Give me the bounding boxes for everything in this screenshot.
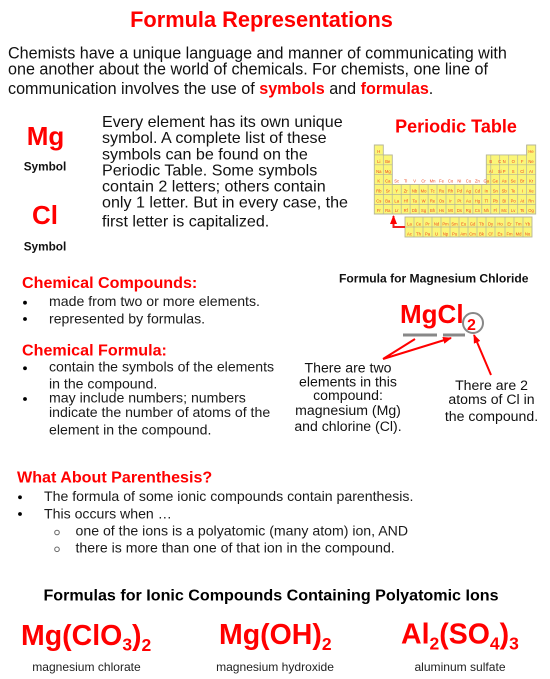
diagram heading: Formula for Magnesium Chloride (339, 272, 529, 286)
arrow: subscript (474, 335, 491, 375)
periodic table grid: Fr (377, 208, 381, 213)
intro paragraph: communication involves the use of symbols and formulas. (8, 80, 433, 98)
chemical formula bullets: in the compound. (49, 376, 157, 392)
periodic table grid: Xe (529, 188, 534, 194)
periodic table grid: Hg (475, 198, 481, 204)
periodic table grid: Db (412, 208, 418, 213)
callout: two atoms: the compound. (445, 408, 538, 424)
periodic table grid: Mg (385, 169, 391, 174)
periodic table grid: Lv (511, 208, 516, 213)
periodic table grid: Bk (479, 232, 485, 236)
formula: magnesium hydroxide: 2 (322, 634, 332, 654)
periodic table grid: Cr (421, 178, 426, 184)
periodic table grid: Ne (528, 159, 534, 164)
periodic table grid: Md (516, 232, 522, 236)
periodic table grid: Tm (515, 222, 522, 226)
intro paragraph: one another about the world of chemicals. For chemists, one line of (8, 60, 489, 78)
periodic table grid: Sn (493, 188, 499, 194)
formula: aluminum sulfate: 4 (490, 634, 500, 654)
periodic table grid: Nh (484, 208, 490, 213)
intro paragraph: Chemists have a unique language and manner of communicating with (8, 44, 507, 62)
periodic table grid: W (422, 198, 426, 204)
periodic table grid: La (394, 198, 400, 204)
periodic table grid: Gd (470, 222, 476, 226)
periodic table grid: Ti (404, 178, 407, 184)
callout: two elements: and chlorine (Cl). (294, 418, 402, 434)
periodic table grid: Cm (469, 232, 476, 236)
chemical compounds heading: Chemical Compounds: (22, 274, 197, 292)
periodic table grid: He (528, 149, 534, 154)
callout: two atoms (445, 377, 538, 424)
panel: chemical compounds (22, 274, 260, 326)
chemical compounds bullets: made from two or more elements. (49, 293, 260, 309)
panel: periodic table (374, 117, 536, 237)
chemical compounds bullets: represented by formulas. (49, 310, 205, 326)
periodic table grid: Eu (461, 222, 467, 226)
formula: magnesium chlorate (21, 620, 152, 674)
periodic table grid: Y (395, 188, 398, 194)
formula: magnesium chlorate: Mg(ClO (21, 620, 122, 652)
formula: aluminum sulfate: (SO (439, 618, 490, 650)
periodic table grid: Cf (488, 232, 493, 236)
formula: magnesium hydroxide: Mg(OH) (219, 619, 322, 651)
periodic table grid: Ni (457, 178, 461, 184)
periodic table grid: Og (528, 208, 535, 213)
periodic table grid: Cu (466, 178, 472, 184)
periodic table grid: Ds (457, 208, 462, 213)
periodic table grid: Mc (501, 208, 507, 213)
periodic table grid: Rn (528, 198, 534, 204)
periodic table grid: O (512, 159, 516, 164)
periodic table grid: In (485, 188, 489, 194)
periodic table grid: Ag (466, 188, 472, 194)
formula: aluminum sulfate (401, 618, 519, 674)
periodic table grid: Fe (439, 178, 445, 184)
periodic table grid: Be (385, 159, 391, 164)
periodic table grid: Pt (457, 198, 462, 204)
callout: two elements: magnesium (Mg) (295, 402, 401, 418)
parenthesis heading: What About Parenthesis? (17, 469, 212, 487)
periodic table grid: Rg (466, 208, 472, 213)
parenthesis bullets: The formula of some ionic compounds contain parenthesis. (44, 488, 413, 504)
periodic table grid: Sr (386, 188, 390, 194)
periodic table grid: U (435, 232, 438, 236)
formula: MgCl2: MgCl (400, 299, 464, 329)
periodic table grid: No (525, 232, 531, 236)
periodic table grid: Ra (385, 208, 391, 213)
periodic table grid: Ac (407, 232, 412, 236)
periodic table grid: Rb (376, 188, 382, 194)
periodic table grid: C (498, 159, 501, 164)
periodic table grid: Tl (485, 198, 488, 204)
periodic table grid: Es (498, 232, 502, 236)
periodic table grid: Li (377, 159, 380, 164)
periodic table grid: Ta (412, 198, 417, 204)
periodic table grid: At (520, 198, 525, 204)
periodic table grid: Ho (497, 222, 503, 226)
periodic table grid: Pm (442, 222, 449, 226)
panel: chemical formula (22, 342, 274, 437)
subscript highlight circle (463, 313, 483, 333)
periodic table grid: Th (416, 232, 422, 236)
periodic table grid: Si (498, 169, 502, 174)
periodic table grid: Mt (448, 208, 454, 213)
chemical formula heading: Chemical Formula: (22, 342, 167, 360)
periodic table grid: Er (507, 222, 512, 226)
intro paragraph (8, 44, 507, 98)
periodic table grid: Sb (502, 188, 507, 194)
periodic table grid: Br (520, 178, 525, 184)
periodic table grid: Tc (431, 188, 435, 194)
periodic table grid: Sc (394, 178, 399, 184)
parenthesis bullets: one of the ions is a polyatomic (many atom) ion, AND (76, 523, 408, 539)
periodic table grid: Al (489, 169, 493, 174)
periodic table grid: Cs (376, 198, 381, 204)
periodic table grid: Cn (475, 208, 481, 213)
periodic table grid: Cl (520, 169, 524, 174)
periodic table grid: La (407, 222, 412, 226)
periodic table grid: Ce (416, 222, 422, 226)
periodic table grid: Bh (430, 208, 436, 213)
callout: two atoms: atoms of Cl in (448, 391, 535, 407)
formula: aluminum sulfate: 3 (509, 634, 519, 654)
periodic table grid: Rh (448, 188, 454, 194)
periodic table grid: Am (460, 232, 467, 236)
callout: two elements (294, 359, 402, 434)
label: Symbol (Cl): Symbol (24, 240, 66, 254)
periodic table grid: Ar (529, 169, 534, 174)
periodic table grid: Ru (439, 188, 445, 194)
periodic table grid: Os (439, 198, 444, 204)
element symbol explanation: symbol. A complete list of these (102, 129, 327, 147)
periodic table grid: Np (443, 232, 449, 236)
parenthesis bullets (18, 488, 413, 556)
formula: aluminum sulfate: Al (401, 618, 430, 650)
formula: aluminum sulfate: aluminum sulfate (414, 660, 506, 674)
periodic table grid: Co (448, 178, 454, 184)
chemical formula bullets: indicate the number of atoms of the (49, 404, 270, 420)
periodic table grid: N (503, 159, 506, 164)
periodic table grid: Yb (525, 222, 531, 226)
periodic table grid: Cd (475, 188, 481, 194)
periodic table grid: K (377, 178, 380, 184)
periodic table grid: Zn (475, 178, 481, 184)
periodic table grid: I (522, 188, 523, 194)
callout: two elements: elements in this (299, 374, 397, 390)
periodic table heading: Periodic Table (395, 117, 517, 137)
formula: magnesium chlorate: magnesium chlorate (32, 660, 141, 674)
chemical formula bullets: contain the symbols of the elements (49, 359, 274, 375)
title: Formula Representations (130, 7, 393, 32)
periodic table grid: Re (430, 198, 436, 204)
periodic table grid: Pb (493, 198, 499, 204)
callout: two atoms: There are 2 (455, 377, 528, 393)
periodic table grid: Dy (488, 222, 494, 226)
chemical compounds bullets (23, 293, 260, 326)
formula: aluminum sulfate: ) (500, 618, 509, 650)
formula: MgCl2: 2 (467, 317, 476, 334)
element symbol explanation: symbols can be found on the (102, 145, 308, 163)
chemical formula bullets: may include numbers; numbers (49, 390, 246, 406)
periodic table grid: F (521, 159, 524, 164)
periodic table grid (374, 145, 536, 237)
periodic table grid: As (502, 178, 507, 184)
periodic table grid: Rf (404, 208, 409, 213)
periodic table grid: Po (511, 198, 516, 204)
periodic table grid: Lr (395, 208, 399, 213)
periodic table grid: Nb (412, 188, 418, 194)
periodic table grid: Mn (430, 178, 436, 184)
callout: two elements: compound: (313, 387, 383, 403)
periodic table grid: Fl (494, 208, 497, 213)
element symbol explanation: Periodic Table. Some symbols (102, 162, 317, 180)
element symbol explanation: only 1 letter. But in every case, the (102, 194, 348, 212)
formula: magnesium chlorate: 3 (122, 634, 132, 654)
chemical formula bullets (23, 359, 274, 437)
periodic table grid: Zr (404, 188, 408, 194)
periodic table grid: Pa (425, 232, 431, 236)
periodic table grid: Sm (451, 222, 458, 226)
formula: aluminum sulfate: 2 (430, 634, 440, 654)
periodic table grid: Sg (421, 208, 427, 213)
label: Symbol (Mg): Symbol (24, 160, 66, 174)
arrow: lanthanide link (394, 216, 405, 227)
symbol: Mg: Mg (27, 121, 64, 151)
periodic table grid: Bi (502, 198, 506, 204)
element symbols (24, 121, 66, 254)
periodic table grid: Tb (479, 222, 485, 226)
element underlines (403, 334, 465, 336)
periodic table grid: Fm (506, 232, 513, 236)
periodic table grid: Ge (493, 178, 499, 184)
periodic table grid: H (377, 149, 380, 154)
periodic table grid: Pr (425, 222, 430, 226)
symbol: Cl: Cl (32, 200, 58, 230)
formula: magnesium chlorate: 2 (142, 635, 152, 655)
periodic table grid: Pu (452, 232, 458, 236)
formula: magnesium hydroxide: magnesium hydroxide (216, 660, 334, 674)
panel: parenthesis (17, 469, 413, 556)
element symbol explanation (102, 113, 348, 231)
periodic table grid: Mo (421, 188, 427, 194)
polyatomic heading: Formulas for Ionic Compounds Containing Polyatomic Ions (43, 587, 499, 605)
panel: polyatomic formulas (21, 587, 519, 674)
callout: two elements: There are two (305, 359, 392, 375)
periodic table grid: P (503, 169, 506, 174)
arrows: elements (383, 338, 451, 359)
periodic table grid: Se (511, 178, 516, 184)
periodic table grid: Ga (484, 178, 490, 184)
formula: magnesium hydroxide (216, 619, 334, 674)
periodic table grid: Pd (457, 188, 463, 194)
chemical formula bullets: element in the compound. (49, 421, 211, 437)
periodic table grid: Hs (439, 208, 444, 213)
periodic table grid: Ir (449, 198, 452, 204)
periodic table grid: Na (376, 169, 382, 174)
periodic table grid: Kr (529, 178, 534, 184)
periodic table grid: Nd (434, 222, 440, 226)
periodic table grid: Hf (404, 198, 409, 204)
periodic table grid: V (413, 178, 416, 184)
periodic table grid: Te (511, 188, 516, 194)
periodic table grid: Ca (385, 178, 391, 184)
periodic table grid: Au (466, 198, 472, 204)
element symbol explanation: contain 2 letters; others contain (102, 178, 326, 196)
parenthesis bullets: This occurs when … (44, 505, 172, 521)
parenthesis bullets: there is more than one of that ion in the compound. (76, 540, 395, 556)
formula: magnesium chlorate: ) (132, 620, 142, 652)
panel: magnesium chloride diagram (294, 272, 538, 434)
periodic table grid: Ts (520, 208, 524, 213)
periodic table grid: Ba (385, 198, 391, 204)
periodic table grid: B (489, 159, 492, 164)
element symbol explanation: Every element has its own unique (102, 113, 343, 131)
periodic table grid: S (512, 169, 515, 174)
element symbol explanation: first letter is capitalized. (102, 213, 269, 231)
